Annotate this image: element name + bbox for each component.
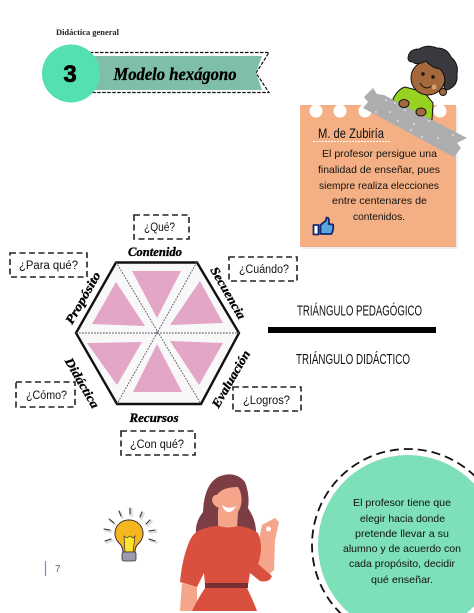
hexagon side labels: Evaluación (208, 348, 253, 411)
section banner: 3 (63, 61, 77, 88)
callout circle: El profesor tiene que (353, 497, 451, 509)
hexagon side labels: Recursos (128, 411, 179, 425)
icon: thumbs up (314, 218, 333, 234)
question boxes: ¿Cómo? (26, 390, 67, 402)
illustration: boy (393, 46, 457, 120)
page number: 7 (55, 564, 61, 575)
question boxes: ¿Qué? (144, 222, 175, 234)
question boxes: ¿Con qué? (130, 439, 184, 451)
section banner: Modelo hexágono (113, 64, 236, 84)
illustration: teacher (180, 474, 279, 611)
note text: finalidad de enseñar, pues (318, 164, 440, 176)
washi tape (363, 88, 467, 157)
note text (318, 148, 440, 223)
question boxes (10, 215, 301, 455)
page number (46, 561, 61, 576)
panel: note by M. de Zubiría (300, 104, 458, 249)
note text: siempre realiza elecciones (319, 180, 439, 192)
hexagon side labels: Propósito (62, 269, 104, 327)
question boxes: ¿Logros? (243, 395, 290, 407)
question boxes: ¿Para qué? (19, 260, 78, 272)
hexagon side labels: Secuencia (207, 264, 249, 322)
callout circle: cada propósito, decidir (349, 558, 455, 570)
page heading: Didáctica general (56, 27, 120, 37)
callout circle: pretende llevar a su (355, 528, 449, 540)
callout circle: qué enseñar. (371, 574, 433, 586)
note text: El profesor persigue una (322, 148, 437, 160)
hexagon side labels (61, 245, 253, 425)
note text: entre centenares de (332, 195, 427, 207)
question boxes: ¿Cuándo? (239, 264, 289, 276)
triangle comparison: TRIÁNGULO DIDÁCTICO (296, 351, 410, 368)
icon: light bulb (104, 508, 156, 561)
note author: M. de Zubiría (318, 125, 384, 141)
callout circle (312, 449, 474, 613)
pink triangles (87, 271, 223, 392)
hexagon side labels: Contenido (128, 245, 182, 259)
section banner (42, 44, 269, 102)
callout circle: alumno y de acuerdo con (343, 543, 461, 555)
hexagon side labels: Didáctica (61, 354, 102, 411)
callout circle: elegir hacia donde (360, 513, 445, 525)
hexagon diagram (76, 262, 239, 404)
boy hands (399, 100, 426, 116)
triangle comparison (268, 302, 436, 368)
note text: contenidos. (353, 211, 405, 223)
